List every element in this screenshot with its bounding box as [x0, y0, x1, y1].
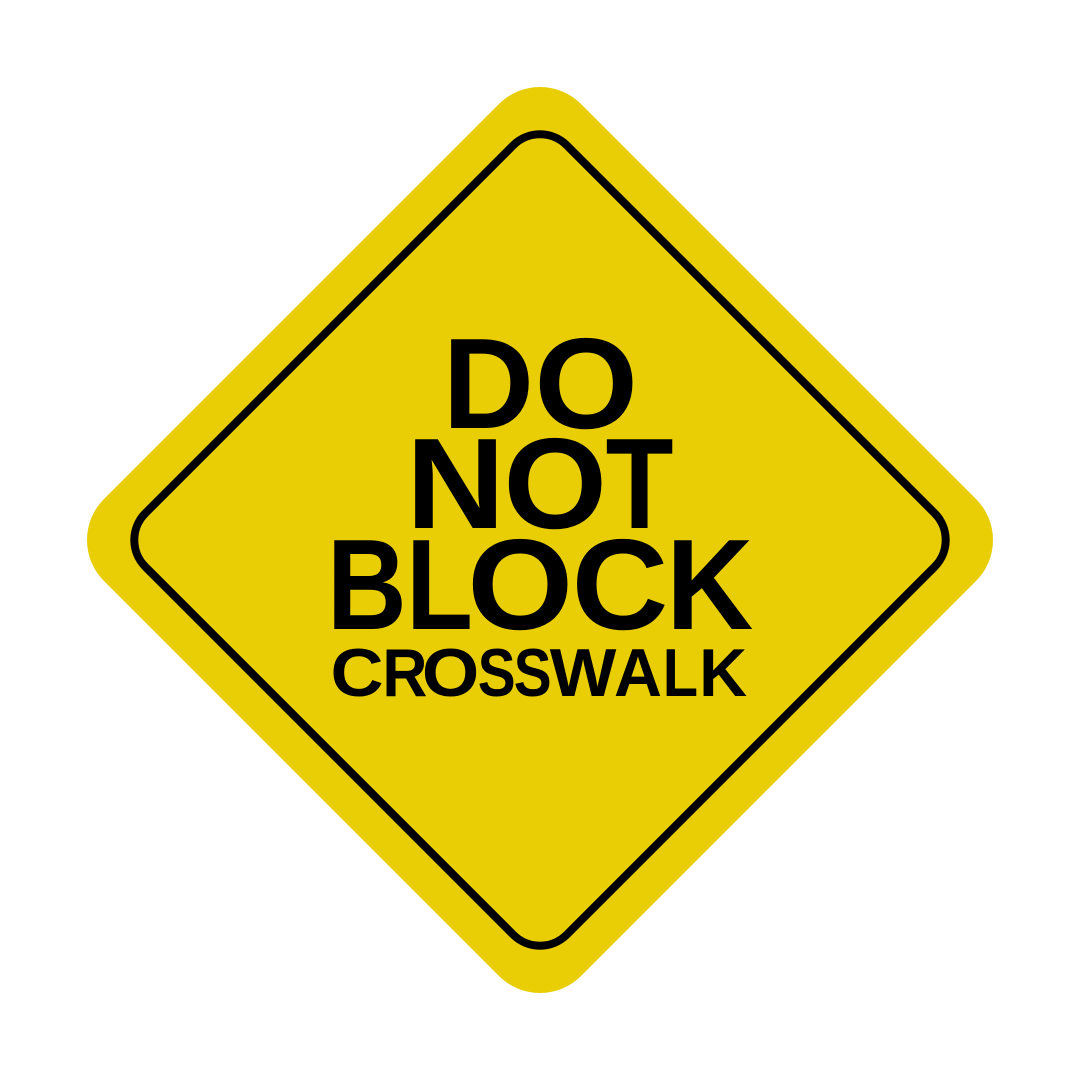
text line: CROSSWALK: R	[382, 635, 427, 711]
text line: DO	[443, 311, 638, 456]
text line: DO: D	[443, 312, 534, 456]
text line: BLOCK: O	[467, 513, 573, 657]
text line: CROSSWALK: S	[514, 635, 552, 711]
sign message	[327, 311, 753, 711]
text line: BLOCK: C	[572, 512, 668, 656]
text line: BLOCK: K	[666, 513, 753, 657]
sign: yellow diamond	[63, 63, 1017, 1017]
text line: CROSSWALK: A	[614, 635, 662, 711]
text line: NOT	[406, 411, 673, 556]
text line: BLOCK: B	[327, 513, 407, 657]
text line: CROSSWALK	[330, 634, 747, 711]
text line: CROSSWALK: S	[478, 635, 516, 711]
text line: NOT: T	[606, 411, 673, 556]
text line: BLOCK	[327, 512, 753, 657]
text line: CROSSWALK: C	[330, 635, 384, 710]
text line: CROSSWALK: W	[550, 634, 617, 711]
text line: CROSSWALK: K	[699, 635, 747, 711]
text line: NOT: N	[406, 412, 505, 556]
text line: DO: O	[534, 311, 638, 456]
text line: BLOCK: L	[406, 514, 473, 657]
sign: inner black border	[119, 119, 961, 961]
text line: CROSSWALK: O	[422, 636, 479, 711]
text line: NOT: O	[503, 411, 607, 556]
text line: CROSSWALK: L	[663, 636, 698, 711]
